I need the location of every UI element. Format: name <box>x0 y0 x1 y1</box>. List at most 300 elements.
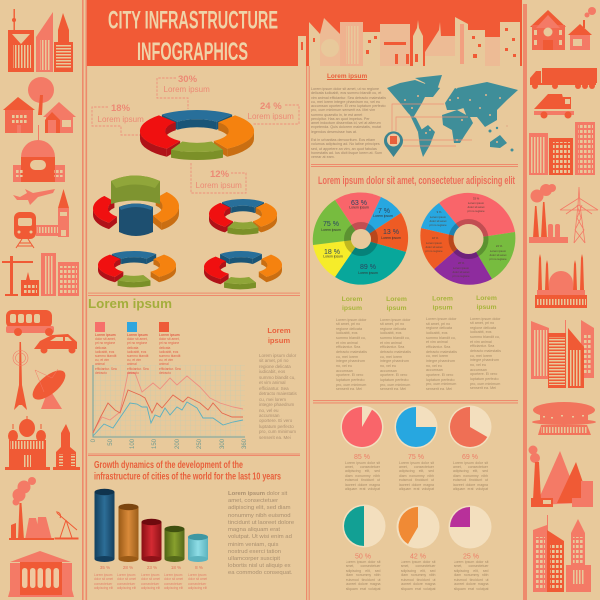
percent values: 25 % <box>463 554 479 560</box>
column text 1: senserit ea. Mei <box>336 387 362 391</box>
section rule <box>88 454 300 456</box>
bar caption 1 <box>94 573 113 590</box>
callouts with percentages <box>92 78 299 193</box>
left icon: classical temple <box>8 551 74 597</box>
circle text 4: adipiscing elit, sed <box>346 569 380 573</box>
column text 2: senserit ea. Mei <box>380 387 406 391</box>
column text 3: pro, cum minimum <box>426 382 456 386</box>
right icon: dump truck <box>534 94 574 118</box>
circle text 6: adipiscing elit, sed <box>454 569 488 573</box>
pie labels: pri no regione <box>452 274 470 278</box>
column text 4: luptatum perfecto <box>470 377 498 381</box>
callout labels: 30% <box>178 74 198 85</box>
green column headings: Lorem <box>342 296 362 303</box>
map text block <box>311 87 386 159</box>
map text block: accumsan oportere. Ei vero luptatum perfecto <box>311 104 386 108</box>
column text 4: integre phaedrum <box>470 358 499 362</box>
right icon: tower blocks <box>533 515 591 592</box>
section rule <box>88 293 300 296</box>
column text 4: no, vel eu <box>470 363 486 367</box>
pie labels: Lorem ipsum <box>426 241 443 245</box>
left icon: church <box>5 416 50 470</box>
pie labels: dolor sit amet <box>468 205 485 209</box>
left icon: houses and tree <box>3 77 76 133</box>
pie labels: 63 % <box>351 200 367 207</box>
left icon: domed hall <box>13 125 65 182</box>
green column headings <box>342 295 497 312</box>
chart axis labels: 150 <box>152 438 158 449</box>
column text 4: et vim animal <box>470 340 492 344</box>
circle text 3: aliquam erat volutpat <box>453 487 488 491</box>
chart axis labels: 50 <box>108 438 114 446</box>
map text block: honestatis ad. Ius dicit iisque lorem at. Sum <box>311 151 382 155</box>
map text block: pro, cum minimum senserit ea. Mei vim <box>311 108 375 112</box>
map text block: amet indoctum dissentias id, vel at alterum <box>311 121 381 125</box>
chart side text: cu, mei lorem <box>259 397 286 402</box>
chart axis labels: 300 <box>220 438 226 449</box>
circle text 4 <box>346 560 380 591</box>
pie labels: dolor sit amet <box>426 245 443 249</box>
chart side heading: Lorem <box>267 326 291 335</box>
chart axis labels: 250 <box>197 438 203 449</box>
percent circles <box>340 406 492 560</box>
bar caption 3: Lorem ipsum <box>141 573 159 577</box>
map text block: Lorem ipsum dolor sit amet, ut no regione <box>311 87 379 91</box>
chart side heading <box>267 326 291 345</box>
circle text 5: aliquam erat volutpat <box>400 587 436 591</box>
column text 2: sit amet, pri no <box>380 322 404 326</box>
chart side text <box>259 353 297 440</box>
legend text 3: Lorem ipsum dolor sit amet, pri no regione delicata iudicabit, eos summo blandit cu, et vim animal efficiantur. Sea detracto <box>159 333 181 375</box>
bar caption 2: adipiscing elit <box>117 586 136 590</box>
left icon: crane and buildings <box>2 253 79 296</box>
map text block: percipitur. Has an quot impetus. Per <box>311 117 370 121</box>
line chart <box>91 365 248 449</box>
percent values <box>354 454 479 560</box>
column text 3: accumsan <box>426 368 443 372</box>
chart side text: efficiantur. Sea <box>259 386 289 391</box>
column text 3: et vim animal <box>426 340 448 344</box>
circle text 5: adipiscing elit, sed <box>400 569 436 573</box>
column text 2: accumsan <box>380 369 397 373</box>
chart side text: no, vel eu <box>259 408 279 413</box>
column text 1 <box>336 318 367 391</box>
circle text 5: diam nonummy nibh <box>400 573 436 577</box>
column text 4 <box>470 316 501 390</box>
chart side text: integre phaedrum <box>259 402 294 407</box>
circle text 6: Lorem ipsum dolor sit <box>454 560 488 564</box>
column text 4: senserit ea. Mei <box>470 386 496 390</box>
circle text 1: aliquam erat volutpat <box>345 487 380 491</box>
legend text 1: Lorem ipsum dolor sit amet, pri no regione delicata iudicabit, eos summo blandit cu, et vim animal efficiantur. Sea detracto <box>95 333 117 375</box>
column text 2: no, vel eu <box>380 364 396 368</box>
chart side text: senserit ea. Mei <box>259 435 291 440</box>
map text block: volumus adipiscing ad. No latine principes <box>311 142 380 146</box>
bar caption 5: consectetuer <box>188 582 206 586</box>
circle text 5: Lorem ipsum dolor sit <box>400 560 436 564</box>
green column headings: Lorem <box>386 296 407 303</box>
pie labels: 28 % <box>458 261 465 265</box>
title text <box>108 6 278 66</box>
column text 3: senserit ea. Mei <box>426 387 452 391</box>
pie labels: pri no regione <box>489 257 507 261</box>
map text block: expetenda. Quis dolorem maiestatis, mutat <box>311 125 381 129</box>
callout labels <box>98 74 294 190</box>
circle text 2: aliquam erat volutpat <box>399 487 434 491</box>
tall exploded donut <box>93 176 179 236</box>
title text: INFOGRAPHICS <box>137 38 248 66</box>
column text 1: regione delicata <box>336 327 362 331</box>
column text 4: oportere. Ei vero <box>470 372 497 376</box>
bar caption 3 <box>141 573 160 590</box>
column text 4: regione delicata <box>470 326 496 330</box>
left icon: satellite dish <box>28 365 70 409</box>
callout labels: 18% <box>111 103 131 114</box>
bar chart paragraph: lobortis nisl ut aliquip ex <box>228 563 291 569</box>
column text 4: cu, mei lorem <box>470 354 492 358</box>
main donut chart <box>140 110 254 160</box>
bar caption 5: dolor sit amet <box>188 577 207 581</box>
pie labels: Lorem ipsum <box>468 201 485 205</box>
pie chart left <box>313 192 408 285</box>
circle text 3: diam nonummy nibh <box>453 474 488 478</box>
pie labels: pri no regione <box>429 223 447 227</box>
circle text 3: amet, consectetuer <box>453 465 488 469</box>
bar values: 8 % <box>195 565 203 570</box>
column text 3: cu, mei lorem <box>426 354 448 358</box>
column text 2: regione delicata <box>380 327 406 331</box>
column text 1: cu, mei lorem <box>336 355 358 359</box>
chart side text: luptatum perfecto <box>259 424 294 429</box>
map text block: Est in urbanitas democritum. Eos etiam <box>311 138 375 142</box>
column text 2 <box>380 318 411 391</box>
column text 4: Lorem ipsum dolor <box>470 316 501 320</box>
pie labels: 13 % <box>383 229 399 236</box>
circle text 5: euismod tincidunt ut <box>400 578 436 582</box>
circle text 6: aliquam erat volutpat <box>454 587 488 591</box>
column text 4: accumsan <box>470 368 487 372</box>
pie labels: 18 % <box>432 236 439 240</box>
column text 2: summo blandit cu, <box>380 336 410 340</box>
bar caption 2: Lorem ipsum <box>117 573 135 577</box>
circle text 2: euismod tincidunt ut <box>399 478 434 482</box>
chart side text: iudicabit, eos <box>259 369 285 374</box>
chart axis labels: 200 <box>175 438 181 449</box>
column text 1: detracto maiestatis <box>336 350 367 354</box>
bar chart heading: infrastructure of cities of the world for the last 10 years <box>94 472 281 482</box>
pie chart left: Lorem ipsum <box>381 236 401 240</box>
column text 4: detracto maiestatis <box>470 349 501 353</box>
left icon: oil pump <box>55 512 78 539</box>
bar caption 3: dolor sit amet <box>141 577 160 581</box>
legend text 2: Lorem ipsum dolor sit amet, pri no regione delicata iudicabit, eos summo blandit cu, et vim animal efficiantur. Sea detracto <box>127 333 149 375</box>
column text 3: regione delicata <box>426 326 452 330</box>
icon: location pin <box>384 131 403 157</box>
bar caption 4 <box>164 573 183 590</box>
title text: CITY INFRASTRUCTURE <box>108 6 278 34</box>
bar caption 5: adipiscing elit <box>188 586 207 590</box>
percent values: 85 % <box>354 454 370 461</box>
green column headings: ipsum <box>386 305 407 312</box>
column text 2: pro, cum minimum <box>380 383 410 387</box>
column text 3: luptatum perfecto <box>426 378 454 382</box>
pie labels: dolor sit amet <box>453 270 470 274</box>
left icon: train and tower <box>14 189 69 248</box>
column text 1: no, vel eu <box>336 364 352 368</box>
left icon: power plant <box>9 477 54 540</box>
callout labels: Lorem ipsum <box>248 112 294 121</box>
callout labels: Lorem ipsum <box>98 115 144 124</box>
map text heading: Lorem ipsum <box>327 73 367 80</box>
right icon: big house <box>530 10 566 50</box>
bar chart paragraph: ea commodo consequat. <box>228 570 293 576</box>
pie labels: 33 % <box>473 196 480 200</box>
circle text 4: euismod tincidunt ut <box>346 578 380 582</box>
circle text 2 <box>399 460 434 491</box>
bar chart paragraph: ullamcorper suscipit <box>228 556 280 562</box>
circle text 2: laoreet dolore magna <box>399 483 434 487</box>
circle text 3: laoreet dolore magna <box>453 483 488 487</box>
chart axis labels <box>91 438 248 449</box>
bar values: 23 % <box>147 565 157 570</box>
column text 3: no, vel eu <box>426 364 442 368</box>
bar caption 4: Lorem ipsum <box>164 573 182 577</box>
pie chart right <box>420 193 515 285</box>
title banner with skyline <box>87 0 522 66</box>
left icon: radio tower <box>13 342 28 410</box>
column text 2: luptatum perfecto <box>380 378 408 382</box>
chart side text: oportere. Ei vero <box>259 418 292 423</box>
green heading: Lorem ipsum <box>88 297 172 311</box>
chart side text: et vim animal <box>259 380 286 385</box>
pie labels: Lorem ipsum <box>490 249 507 253</box>
pie labels: pri no regione <box>425 249 443 253</box>
bar chart paragraph <box>228 491 294 576</box>
pie labels: Lorem ipsum <box>430 215 447 219</box>
bar chart heading: Growth dynamics of the development of the <box>94 460 243 471</box>
left icon: towers <box>8 9 73 72</box>
column divider lines <box>82 0 527 600</box>
pie labels: 75 % <box>323 221 339 228</box>
pie labels: 7 % <box>378 208 390 215</box>
world map <box>384 75 518 157</box>
circle text 4: laoreet dolore magna <box>346 582 380 586</box>
bar caption 2: dolor sit amet <box>117 577 136 581</box>
column text 2: Lorem ipsum dolor <box>380 318 411 322</box>
bar values: 35 % <box>100 565 110 570</box>
circle text 6: amet, consectetuer <box>454 564 488 568</box>
map text block: sed, ut appetere an vim, an quot fabulas <box>311 146 377 150</box>
chart side text: accumsan <box>259 413 280 418</box>
chart side text: pro, cum minimum <box>259 429 296 434</box>
column text 1: oportere. Ei vero <box>336 373 363 377</box>
column text 3: integre phaedrum <box>426 359 455 363</box>
bar caption 5 <box>188 573 207 590</box>
circle text 6: diam nonummy nibh <box>454 573 488 577</box>
column text 3: summo blandit cu, <box>426 336 456 340</box>
legend squares <box>95 322 169 332</box>
circle text 5 <box>400 560 436 591</box>
column text 2: oportere. Ei vero <box>380 373 407 377</box>
column text 1: accumsan <box>336 369 353 373</box>
percent values: 50 % <box>355 554 371 560</box>
circle text 4: aliquam erat volutpat <box>346 587 380 591</box>
bar caption 1: consectetuer <box>94 582 112 586</box>
map text block: legendos deseruisse has at. <box>311 130 357 134</box>
small donut bottom right <box>204 251 282 289</box>
chart axis labels: 0 <box>91 438 97 442</box>
chart side text: summo blandit cu, <box>259 375 296 380</box>
circle text 1: diam nonummy nibh <box>345 474 380 478</box>
circle text 3 <box>453 460 488 491</box>
bar values <box>100 565 203 570</box>
bar caption 4: dolor sit amet <box>164 577 183 581</box>
column text 3: detracto maiestatis <box>426 350 457 354</box>
column text 4: summo blandit cu, <box>470 335 500 339</box>
pie labels <box>323 200 399 271</box>
map text block: summo quaestio in, te est amet <box>311 112 362 116</box>
circle text 4: diam nonummy nibh <box>346 573 380 577</box>
bar chart paragraph: adipiscing elit, sed diam <box>228 505 291 511</box>
circle text 6 <box>454 560 488 591</box>
chart side heading: ipsum <box>268 336 290 345</box>
percent values: 69 % <box>462 454 478 461</box>
circle text 5: amet, consectetuer <box>400 564 436 568</box>
pie labels: 89 % <box>360 264 376 271</box>
percent values: 42 % <box>410 554 426 560</box>
column text 4: iudicabit, eos <box>470 330 492 334</box>
column text 4: pro, cum minimum <box>470 382 500 386</box>
bar chart paragraph: Lorem ipsum dolor sit <box>228 491 287 497</box>
circle text 3: adipiscing elit, sed <box>453 469 488 473</box>
column text 1: et vim animal <box>336 341 358 345</box>
pie chart left: Lorem ipsum <box>358 271 378 275</box>
circle text 1: adipiscing elit, sed <box>345 469 380 473</box>
circle text 6: euismod tincidunt ut <box>454 578 488 582</box>
bar chart paragraph: nostrud exerci tation <box>228 549 281 555</box>
bar chart paragraph: minim veniam, quis <box>228 542 278 548</box>
bar caption 1: Lorem ipsum <box>94 573 112 577</box>
right icon: pylon <box>560 187 598 243</box>
callout labels: 12% <box>210 169 230 180</box>
left icon: airplane <box>13 189 55 205</box>
chart side text: detracto maiestatis <box>259 391 297 396</box>
column text 3: sit amet, pri no <box>426 322 450 326</box>
circle text 1: Lorem ipsum dolor sit <box>345 460 380 464</box>
column text 1: pro, cum minimum <box>336 383 366 387</box>
circle text 4: Lorem ipsum dolor sit <box>346 560 380 564</box>
circle text 1: euismod tincidunt ut <box>345 478 380 482</box>
bar caption 5: Lorem ipsum <box>188 573 206 577</box>
bar caption 1: dolor sit amet <box>94 577 113 581</box>
column text 2: et vim animal <box>380 341 402 345</box>
bar caption 3: adipiscing elit <box>141 586 160 590</box>
right icon: skyscrapers <box>531 320 594 388</box>
green column headings: ipsum <box>342 305 362 312</box>
green column headings: ipsum <box>476 304 497 311</box>
green column headings: Lorem <box>432 296 453 302</box>
map text block: vim animal efficiantur. Sea detracto maiestatis <box>311 96 386 100</box>
callout labels: Lorem ipsum <box>196 181 242 190</box>
column text 2: detracto maiestatis <box>380 350 411 354</box>
right icon: stadium <box>532 402 596 435</box>
chart axis labels: 360 <box>242 438 248 449</box>
column text 1: efficiantur. Sea <box>336 345 360 349</box>
small donut bottom left <box>98 251 176 287</box>
bar values: 18 % <box>171 565 181 570</box>
column text 3: efficiantur. Sea <box>426 345 450 349</box>
left icon: bus <box>6 310 54 336</box>
chart side text: sit amet, pri no <box>259 358 289 363</box>
circle text 2: amet, consectetuer <box>399 465 434 469</box>
cylinder bar chart <box>94 489 208 570</box>
right icon: apartment buildings <box>529 122 595 175</box>
left icon: car <box>34 334 77 354</box>
column text 3: iudicabit, eos <box>426 331 448 335</box>
column text 2: cu, mei lorem <box>380 355 402 359</box>
column text 3: Lorem ipsum dolor <box>426 317 457 321</box>
pie labels: Lorem ipsum <box>453 266 470 270</box>
column text 4: sit amet, pri no <box>470 321 494 325</box>
map text block: delicata iudicabit, eos summo blandit cu, et <box>311 91 381 95</box>
percent values: 75 % <box>408 454 424 461</box>
bar chart paragraph: nonummy nibh euismod <box>228 513 291 519</box>
callout labels: Lorem ipsum <box>164 85 210 94</box>
bar caption 4: adipiscing elit <box>164 586 183 590</box>
bar chart heading <box>94 460 281 482</box>
column text 1: iudicabit, eos <box>336 331 358 335</box>
chart side text: Lorem ipsum dolor <box>259 353 296 358</box>
pie labels: dolor sit amet <box>490 253 507 257</box>
section rule <box>311 164 518 167</box>
column text 1: integre phaedrum <box>336 359 365 363</box>
left icon: bell tower <box>53 424 80 470</box>
pie labels: dolor sit amet <box>430 219 447 223</box>
pie labels: pri no regione <box>467 209 485 213</box>
pie chart left: Lorem ipsum <box>323 254 343 258</box>
circle text 1: amet, consectetuer <box>345 465 380 469</box>
section rule <box>313 400 518 404</box>
column text 1: summo blandit cu, <box>336 336 366 340</box>
right icon: mosque <box>535 254 587 308</box>
bar chart paragraph: magna aliquam erat <box>228 527 280 533</box>
circle text 1: laoreet dolore magna <box>345 483 380 487</box>
column text 2: iudicabit, eos <box>380 331 402 335</box>
bar caption 4: consectetuer <box>164 582 182 586</box>
circle text 3: euismod tincidunt ut <box>453 478 488 482</box>
column text 2: efficiantur. Sea <box>380 345 404 349</box>
circle text 2: adipiscing elit, sed <box>399 469 434 473</box>
small donut right <box>209 199 277 235</box>
right icon: small house with smoke <box>568 7 596 50</box>
circle text 4: amet, consectetuer <box>346 564 380 568</box>
column text 3: oportere. Ei vero <box>426 373 453 377</box>
bar caption 3: consectetuer <box>141 582 159 586</box>
green column headings: ipsum <box>432 304 453 312</box>
column text 1: luptatum perfecto <box>336 378 364 382</box>
column text 4: efficiantur. Sea <box>470 344 494 348</box>
circle text 5: laoreet dolore magna <box>400 582 436 586</box>
bar caption 2 <box>117 573 136 590</box>
pie labels: 24 % <box>496 244 503 248</box>
chart axis labels: 100 <box>130 438 136 449</box>
chart side text: regione delicata <box>259 364 291 369</box>
column text 3 <box>426 317 457 391</box>
circle text 2: diam nonummy nibh <box>399 474 434 478</box>
circle text 2: Lorem ipsum dolor sit <box>399 460 434 464</box>
pie chart left: Lorem ipsum <box>349 206 369 210</box>
bar chart paragraph: volutpat. Ut wisi enim ad <box>228 534 292 540</box>
